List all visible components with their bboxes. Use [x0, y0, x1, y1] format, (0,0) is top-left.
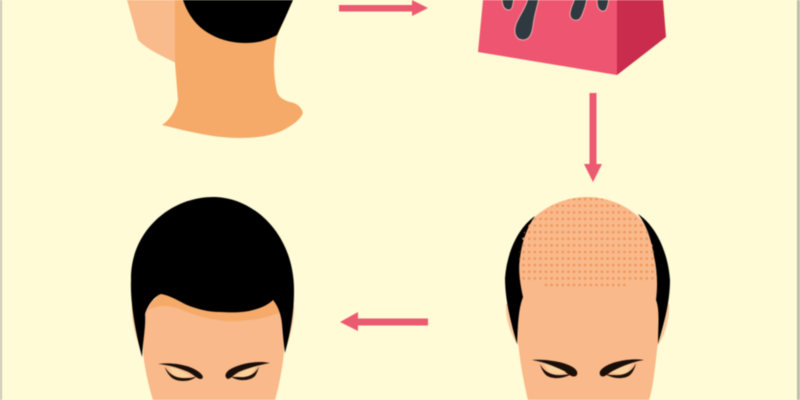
hair [131, 197, 294, 357]
arrow: down [584, 93, 602, 182]
follicles [502, 0, 609, 40]
arrow: left [340, 312, 428, 331]
hair right [638, 214, 670, 344]
block front [478, 0, 617, 75]
step 2: skin block with follicles [478, 0, 666, 75]
eyes [158, 362, 270, 381]
eyes [532, 359, 644, 378]
ears [506, 300, 669, 346]
step 1: back of head [127, 0, 303, 138]
hairline shade [148, 294, 281, 321]
ear shade [127, 0, 176, 63]
hair left [505, 216, 535, 344]
face [515, 197, 660, 400]
dots [518, 198, 654, 286]
block side [617, 0, 666, 75]
step 3: balding head with marked area [505, 195, 670, 400]
arrow: right [339, 0, 428, 16]
ears [132, 305, 294, 352]
neck [162, 0, 303, 138]
hair [183, 0, 293, 43]
face [143, 300, 284, 400]
step 4: restored full hair head [131, 197, 294, 400]
